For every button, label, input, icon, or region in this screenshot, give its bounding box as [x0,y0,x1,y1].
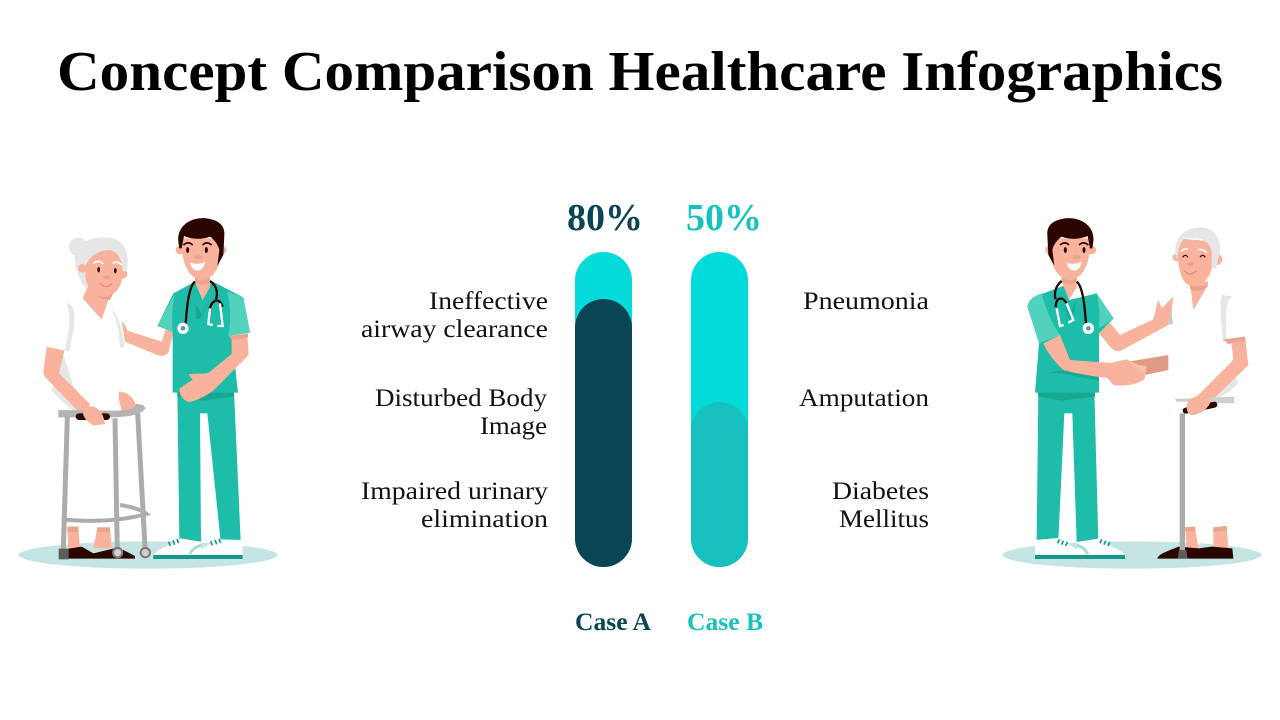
label: Pneumonia: Pneumonia [803,288,929,315]
elderly man [1118,227,1248,559]
illustration: nurse shaking hands with elderly man with cane [1003,218,1261,569]
label: Impaired urinary elimination [361,478,549,533]
label: Disturbed Body Image: Disturbed Body [375,385,548,412]
illustration: nurse with elderly woman on walker [19,218,277,569]
label: Ineffective airway clearance: airway clearance [361,316,548,343]
label: Impaired urinary elimination: elimination [421,506,549,533]
right labels [799,288,930,533]
ground shadow [19,541,277,569]
label: Disturbed Body Image: Image [480,413,547,440]
value: Case B 50%: 50% [686,197,762,239]
label: Diabetes Mellitus: Diabetes [832,478,929,505]
legend: Case B: Case B [687,609,763,636]
label: Ineffective airway clearance: Ineffective [429,288,548,315]
legend: Case A: Case A [575,609,651,636]
value: Case A 80%: 80% [567,197,643,239]
label: Disturbed Body Image [375,385,548,440]
label: Impaired urinary elimination: Impaired urinary [361,478,549,505]
title: Concept Comparison Healthcare Infographics [57,41,1223,103]
left labels [361,288,549,533]
label: Diabetes Mellitus [832,478,929,533]
label: Amputation: Amputation [799,385,930,412]
elderly woman [43,237,137,559]
walker frame [58,404,150,559]
label: Ineffective airway clearance [361,288,548,343]
bar: Case B [691,252,748,567]
label: Diabetes Mellitus: Mellitus [839,506,929,533]
nurse [1027,218,1173,559]
ground shadow [1003,541,1261,569]
nurse [122,218,250,559]
cane [1175,395,1234,559]
bar: Case A [575,252,632,567]
